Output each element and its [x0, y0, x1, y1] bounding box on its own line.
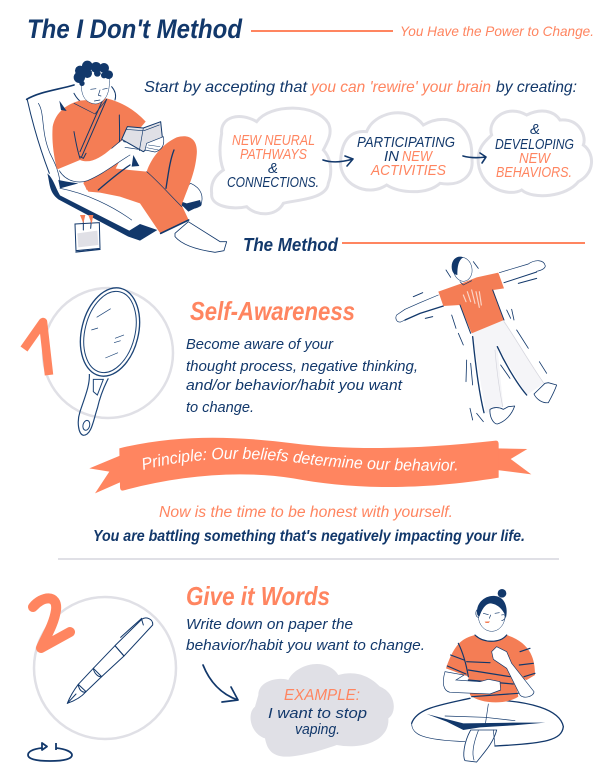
cloud: new neural pathways: [211, 108, 331, 214]
step 2 circle: [34, 597, 176, 739]
cloud: example: vaping.: [295, 721, 340, 738]
cloud: participating in new activities: NEW: [402, 148, 434, 165]
banner: principle: [90, 438, 532, 494]
cup: [75, 223, 100, 251]
text: give it words body: [186, 616, 425, 654]
method rule: [342, 242, 585, 244]
heading: the method: The Method: [243, 235, 339, 255]
orange trousers: [83, 136, 197, 234]
icon: hand mirror: [72, 281, 148, 435]
intro sentence: you can 'rewire' your brain: [310, 79, 491, 96]
cloud: new neural pathways: NEW NEURAL: [232, 132, 315, 149]
cloud: participating in new activities: [341, 113, 472, 192]
cloud: new neural pathways: PATHWAYS: [240, 146, 307, 163]
step 1 number: [24, 322, 49, 375]
illustration: floating man: [396, 256, 557, 424]
intro sentence: Start by accepting that: [144, 79, 308, 96]
step 1 circle: [43, 288, 173, 418]
text: give it words body: behavior/habit you want to change.: [186, 637, 425, 654]
icon: replay control: [28, 743, 72, 761]
subtitle: You Have the Power to Change.: [400, 23, 594, 39]
text: self-awareness body: thought process, negative thinking,: [186, 358, 418, 375]
text: self-awareness body: Become aware of your: [186, 336, 334, 353]
title rule: [251, 30, 393, 32]
title: The I Don't Method: [27, 14, 242, 44]
intro sentence: by creating:: [496, 79, 577, 96]
heading: give it words: Give it Words: [186, 581, 330, 611]
illustration: man reading in chair: [27, 61, 227, 252]
arrow: to example: [203, 665, 238, 702]
foot: [175, 222, 227, 252]
cloud: example: [251, 664, 394, 757]
arrow: cloud one to cloud two: [323, 156, 353, 166]
arm: [57, 139, 138, 182]
icon: fountain pen: [67, 618, 153, 703]
text: you are battling: You are battling something that's negatively impacting your life.: [93, 528, 525, 545]
cloud: example: EXAMPLE:: [284, 687, 360, 704]
cloud: participating in new activities: ACTIVITIES: [370, 162, 446, 179]
step 2 number: [33, 598, 70, 648]
cloud: example: I want to stop: [268, 705, 367, 722]
text: be honest: Now is the time to be honest with yourself.: [159, 504, 453, 521]
book: [122, 122, 162, 152]
orange shirt: [52, 98, 146, 190]
cloud: new neural pathways: CONNECTIONS.: [227, 174, 319, 191]
cloud: developing new behaviors: BEHAVIORS.: [496, 164, 572, 181]
cloud: developing new behaviors: [478, 111, 592, 196]
heading: self-awareness: Self-Awareness: [190, 296, 355, 326]
intro sentence: [144, 79, 577, 96]
cloud: participating in new activities: IN: [384, 148, 399, 165]
cloud: developing new behaviors: NEW: [519, 150, 552, 167]
cloud: developing new behaviors: &: [530, 121, 540, 138]
banner: principle: Principle: Our beliefs determine our behavior.: [142, 447, 457, 471]
text: self-awareness body: [186, 336, 418, 416]
cloud: new neural pathways: &: [268, 160, 278, 177]
head: [81, 70, 109, 104]
text: self-awareness body: and/or behavior/habit you want: [186, 377, 403, 394]
cloud: participating in new activities: PARTICIPATING: [357, 134, 455, 151]
text: give it words body: Write down on paper the: [186, 616, 353, 633]
illustration: meditating woman: [412, 589, 563, 762]
cloud: developing new behaviors: DEVELOPING: [495, 136, 574, 153]
text: self-awareness body: to change.: [186, 399, 254, 416]
arrow: cloud two to cloud three: [463, 153, 486, 163]
